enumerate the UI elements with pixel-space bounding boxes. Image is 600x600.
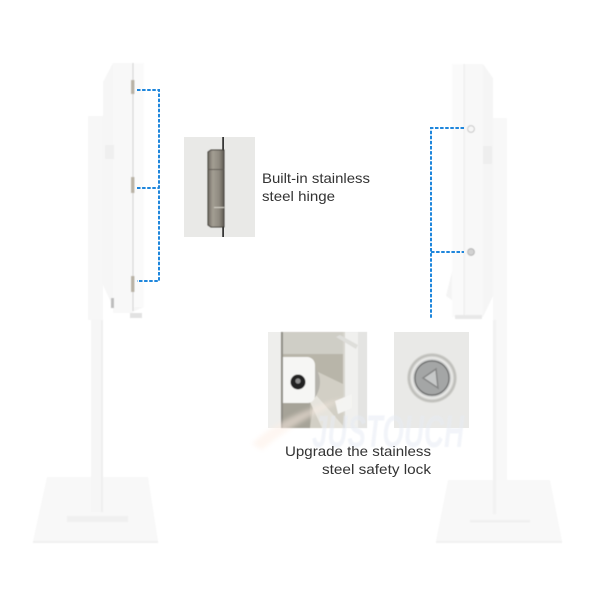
hinge photo bbox=[184, 137, 255, 237]
right lock buttons bbox=[468, 126, 474, 255]
watermark: JUSTOUCH bbox=[312, 406, 465, 457]
lock cylinder photo bbox=[394, 332, 469, 428]
right kiosk pole bbox=[493, 118, 507, 514]
watermark bbox=[252, 398, 465, 457]
lock caption: steel safety lock bbox=[322, 461, 432, 477]
left kiosk base bbox=[33, 477, 158, 543]
lock caption bbox=[285, 443, 432, 477]
right kiosk base bbox=[436, 480, 562, 543]
lock caption: Upgrade the stainless bbox=[285, 443, 431, 459]
right blue dashed callout bbox=[431, 128, 464, 318]
left kiosk pole bbox=[88, 116, 103, 512]
right kiosk side view bbox=[436, 64, 562, 543]
left blue dashed callout bbox=[137, 90, 159, 281]
hinge caption: steel hinge bbox=[262, 188, 335, 204]
left kiosk screen bbox=[103, 63, 144, 318]
hinge caption bbox=[262, 170, 370, 204]
hinge caption: Built-in stainless bbox=[262, 170, 370, 186]
left kiosk side view bbox=[33, 63, 158, 543]
right kiosk screen bbox=[446, 64, 493, 319]
left hinges bbox=[131, 80, 134, 292]
lock interior photo bbox=[268, 332, 367, 428]
